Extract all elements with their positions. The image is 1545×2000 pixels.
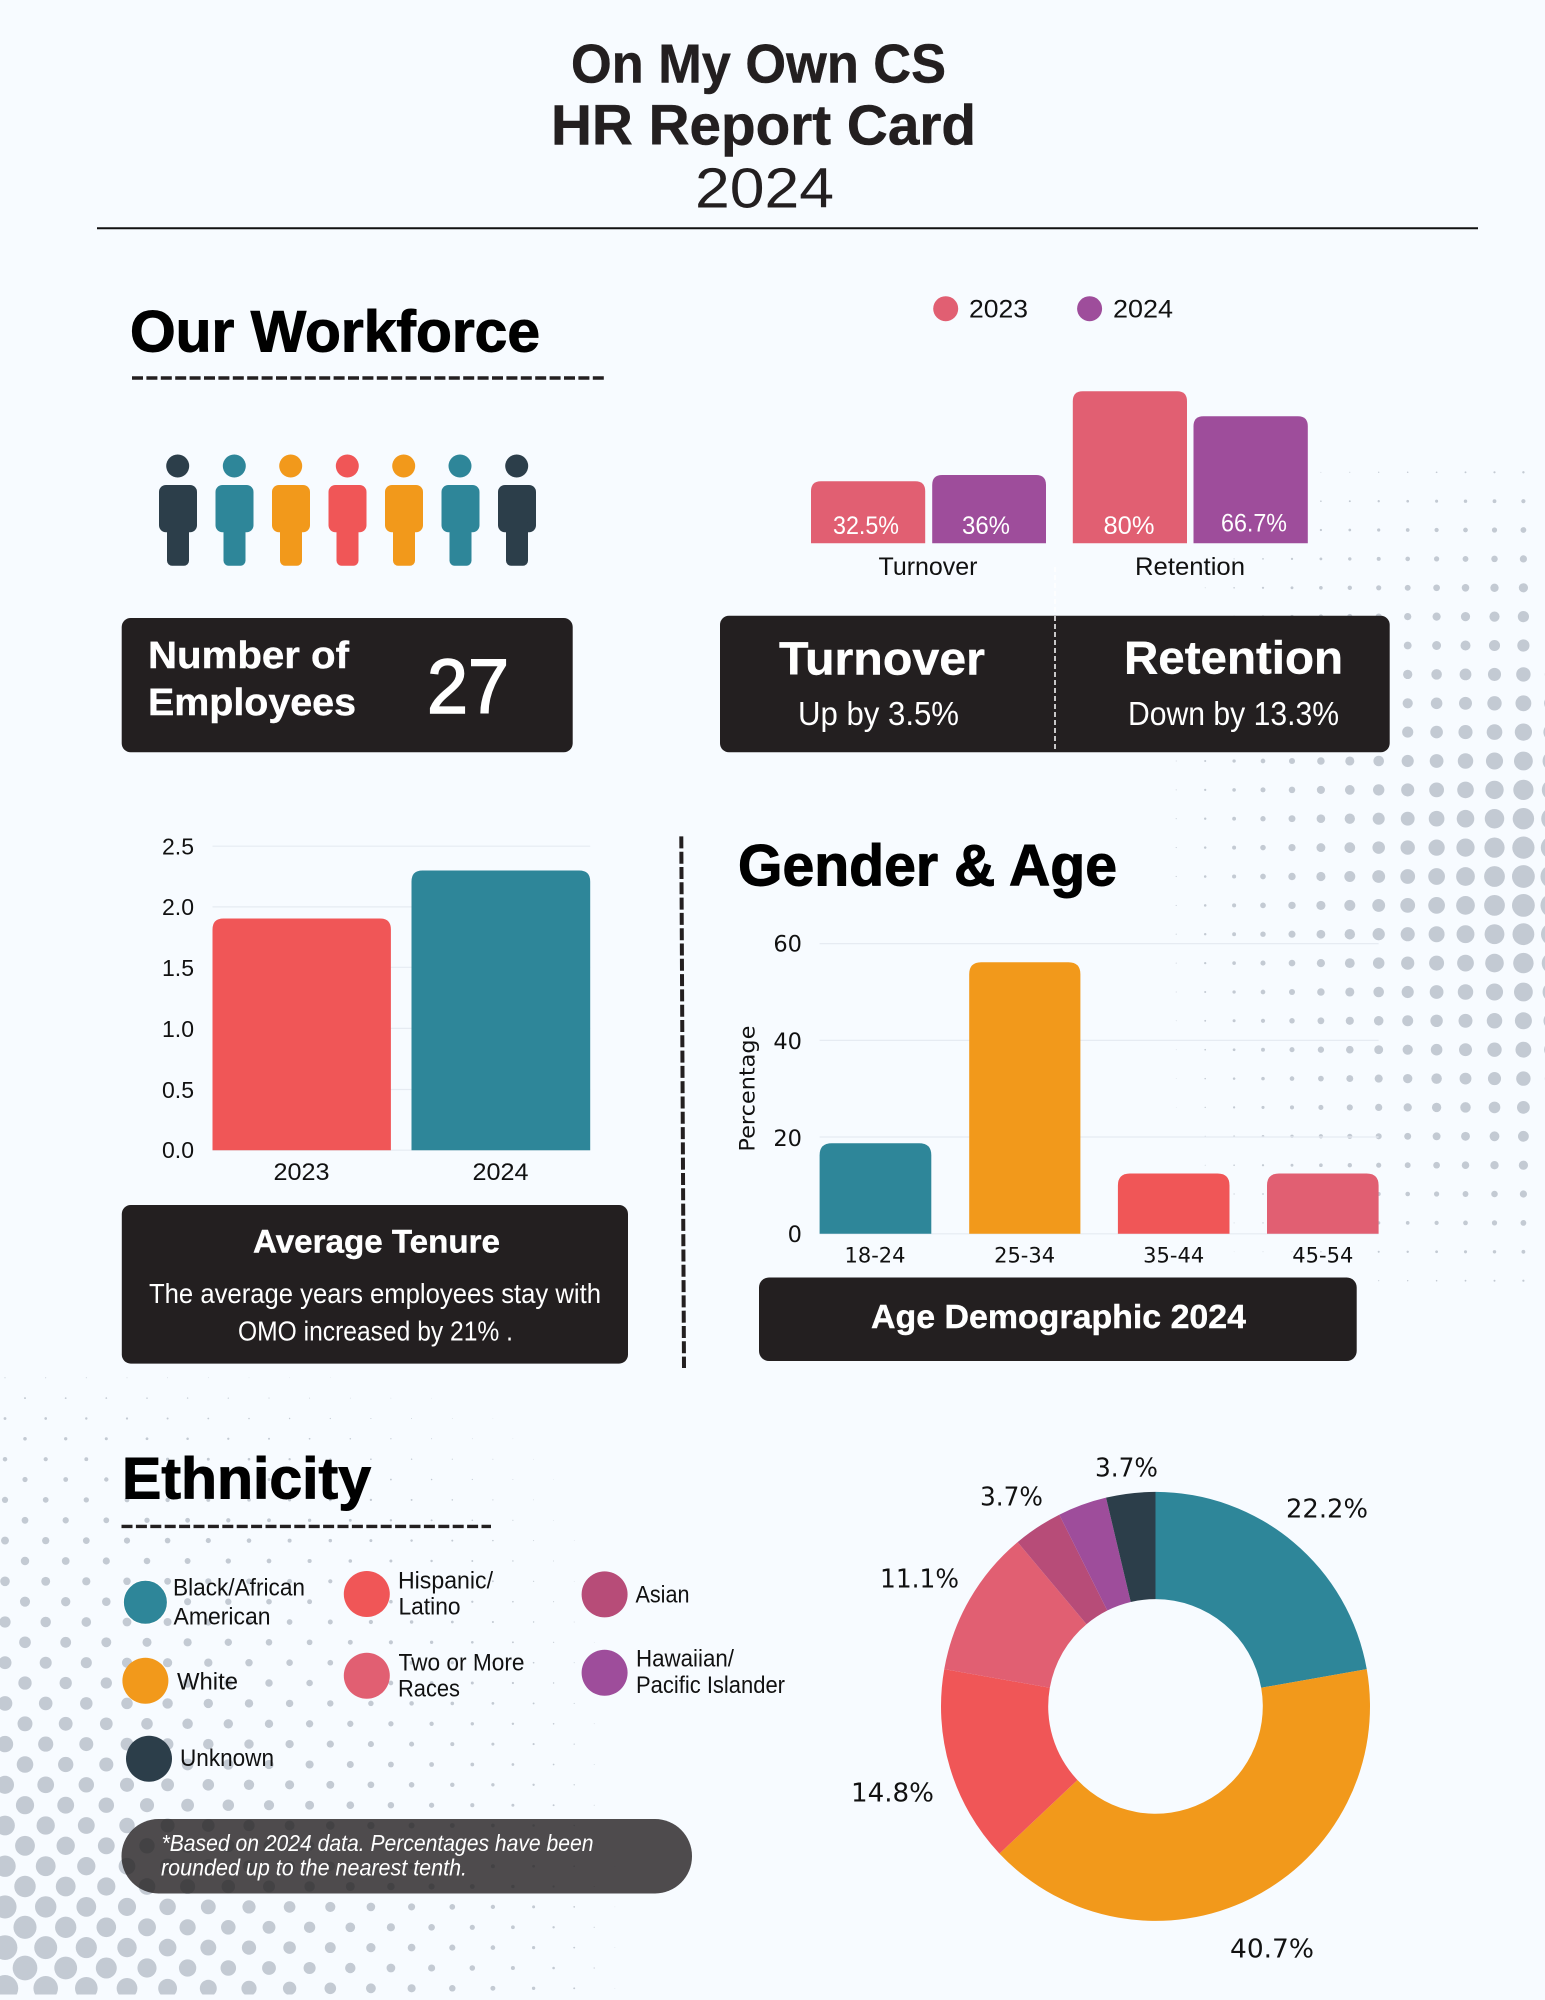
- bar chart: age demographic: 25-34: [994, 1244, 1055, 1268]
- card: number of employees: [122, 618, 573, 752]
- legend: ethnicity: Hispanic/: [398, 1568, 493, 1595]
- title: On My Own CS: [571, 33, 946, 95]
- legend: ethnicity: Races: [398, 1676, 460, 1702]
- donut chart: ethnicity: 14.8%: [851, 1779, 934, 1809]
- bar chart: average tenure: 0.0: [162, 1137, 194, 1163]
- card: turnover and retention summary: Down by 13.3%: [1128, 695, 1339, 732]
- bar chart: age demographic: 35-44: [1143, 1244, 1204, 1268]
- bar chart: age demographic: 40: [773, 1029, 802, 1055]
- card: turnover and retention summary: Up by 3.5%: [798, 695, 959, 732]
- bar chart: turnover and retention: Turnover: [878, 553, 978, 581]
- legend: ethnicity: Latino: [398, 1594, 460, 1621]
- card: number of employees: Number of: [148, 635, 349, 677]
- card: number of employees: Employees: [148, 682, 356, 724]
- bar chart: turnover and retention: 66.7%: [1221, 510, 1287, 538]
- donut chart: ethnicity: 40.7%: [1230, 1934, 1314, 1964]
- bar chart: age demographic: 18-24: [844, 1244, 906, 1268]
- bar chart: average tenure: [162, 834, 590, 1186]
- title: [551, 33, 976, 221]
- bar chart: age demographic: 60: [773, 932, 802, 958]
- bar chart: average tenure: 2023: [274, 1159, 330, 1186]
- bar chart: average tenure: 2024: [472, 1159, 528, 1186]
- bar chart: turnover and retention: Retention: [1135, 553, 1245, 581]
- bar chart: average tenure: 2.5: [162, 834, 194, 860]
- panel: turnover and retention: [720, 296, 1390, 752]
- bar chart: turnover and retention: [811, 391, 1308, 581]
- legend: years: [933, 296, 1173, 324]
- legend: ethnicity: [122, 1568, 785, 1782]
- title: HR Report Card: [551, 94, 976, 158]
- bar chart: turnover and retention: 80%: [1104, 512, 1154, 540]
- bar chart: average tenure: 1.5: [162, 955, 194, 981]
- card: average tenure: Average Tenure: [253, 1224, 500, 1260]
- bar chart: age demographic: 45-54: [1292, 1244, 1353, 1268]
- legend: ethnicity: Two or More: [398, 1649, 524, 1676]
- card: number of employees: 27: [427, 644, 509, 730]
- title: 2024: [695, 157, 834, 221]
- legend: years: 2023: [969, 296, 1028, 324]
- card: average tenure: [122, 1205, 628, 1364]
- card: turnover and retention summary: Retention: [1124, 631, 1343, 683]
- donut chart: ethnicity: 3.7%: [980, 1482, 1043, 1512]
- bar chart: age demographic: 0: [788, 1222, 802, 1248]
- bar chart: average tenure: 0.5: [162, 1077, 194, 1103]
- bar chart: average tenure: 1.0: [162, 1016, 194, 1042]
- card: average tenure: The average years employees stay with: [149, 1278, 601, 1309]
- card: turnover and retention summary: [720, 616, 1390, 752]
- card: age demographic 2024: Age Demographic 2024: [871, 1298, 1247, 1335]
- bar chart: turnover and retention: 32.5%: [833, 512, 899, 540]
- legend: ethnicity: Black/African: [173, 1575, 305, 1602]
- note: data footnote: rounded up to the nearest tenth.: [161, 1854, 467, 1880]
- card: average tenure: OMO increased by 21% .: [238, 1316, 513, 1347]
- panel: average tenure: [122, 834, 628, 1364]
- bar chart: average tenure: 2.0: [162, 894, 194, 920]
- legend: ethnicity: Unknown: [180, 1745, 274, 1772]
- legend: years: 2024: [1113, 296, 1173, 324]
- note: data footnote: [122, 1819, 692, 1894]
- panel: our workforce: [122, 300, 606, 752]
- bar chart: age demographic: Percentage: [736, 1026, 760, 1152]
- heading: our workforce: Our Workforce: [130, 300, 540, 365]
- donut chart: ethnicity: 11.1%: [880, 1564, 959, 1594]
- card: turnover and retention summary: Turnover: [779, 632, 985, 684]
- heading: ethnicity: Ethnicity: [122, 1446, 371, 1512]
- legend: ethnicity: Pacific Islander: [636, 1672, 785, 1699]
- icon: row of people: [159, 454, 536, 566]
- bar chart: turnover and retention: 36%: [962, 512, 1010, 540]
- legend: ethnicity: Hawaiian/: [636, 1646, 734, 1673]
- donut chart: ethnicity: 22.2%: [1286, 1494, 1368, 1524]
- bar chart: age demographic: [736, 932, 1379, 1268]
- panel: gender and age: [736, 834, 1379, 1361]
- donut chart: ethnicity: 3.7%: [1095, 1454, 1158, 1484]
- heading: gender and age: Gender & Age: [738, 834, 1117, 898]
- legend: ethnicity: American: [174, 1604, 270, 1631]
- legend: ethnicity: Asian: [636, 1582, 690, 1609]
- bar chart: age demographic: 20: [773, 1126, 802, 1152]
- note: data footnote: *Based on 2024 data. Percentages have been: [162, 1830, 594, 1856]
- card: age demographic 2024: [759, 1278, 1357, 1361]
- legend: ethnicity: White: [177, 1668, 238, 1695]
- panel: ethnicity: [122, 1446, 1370, 1964]
- donut chart: ethnicity: [851, 1454, 1370, 1964]
